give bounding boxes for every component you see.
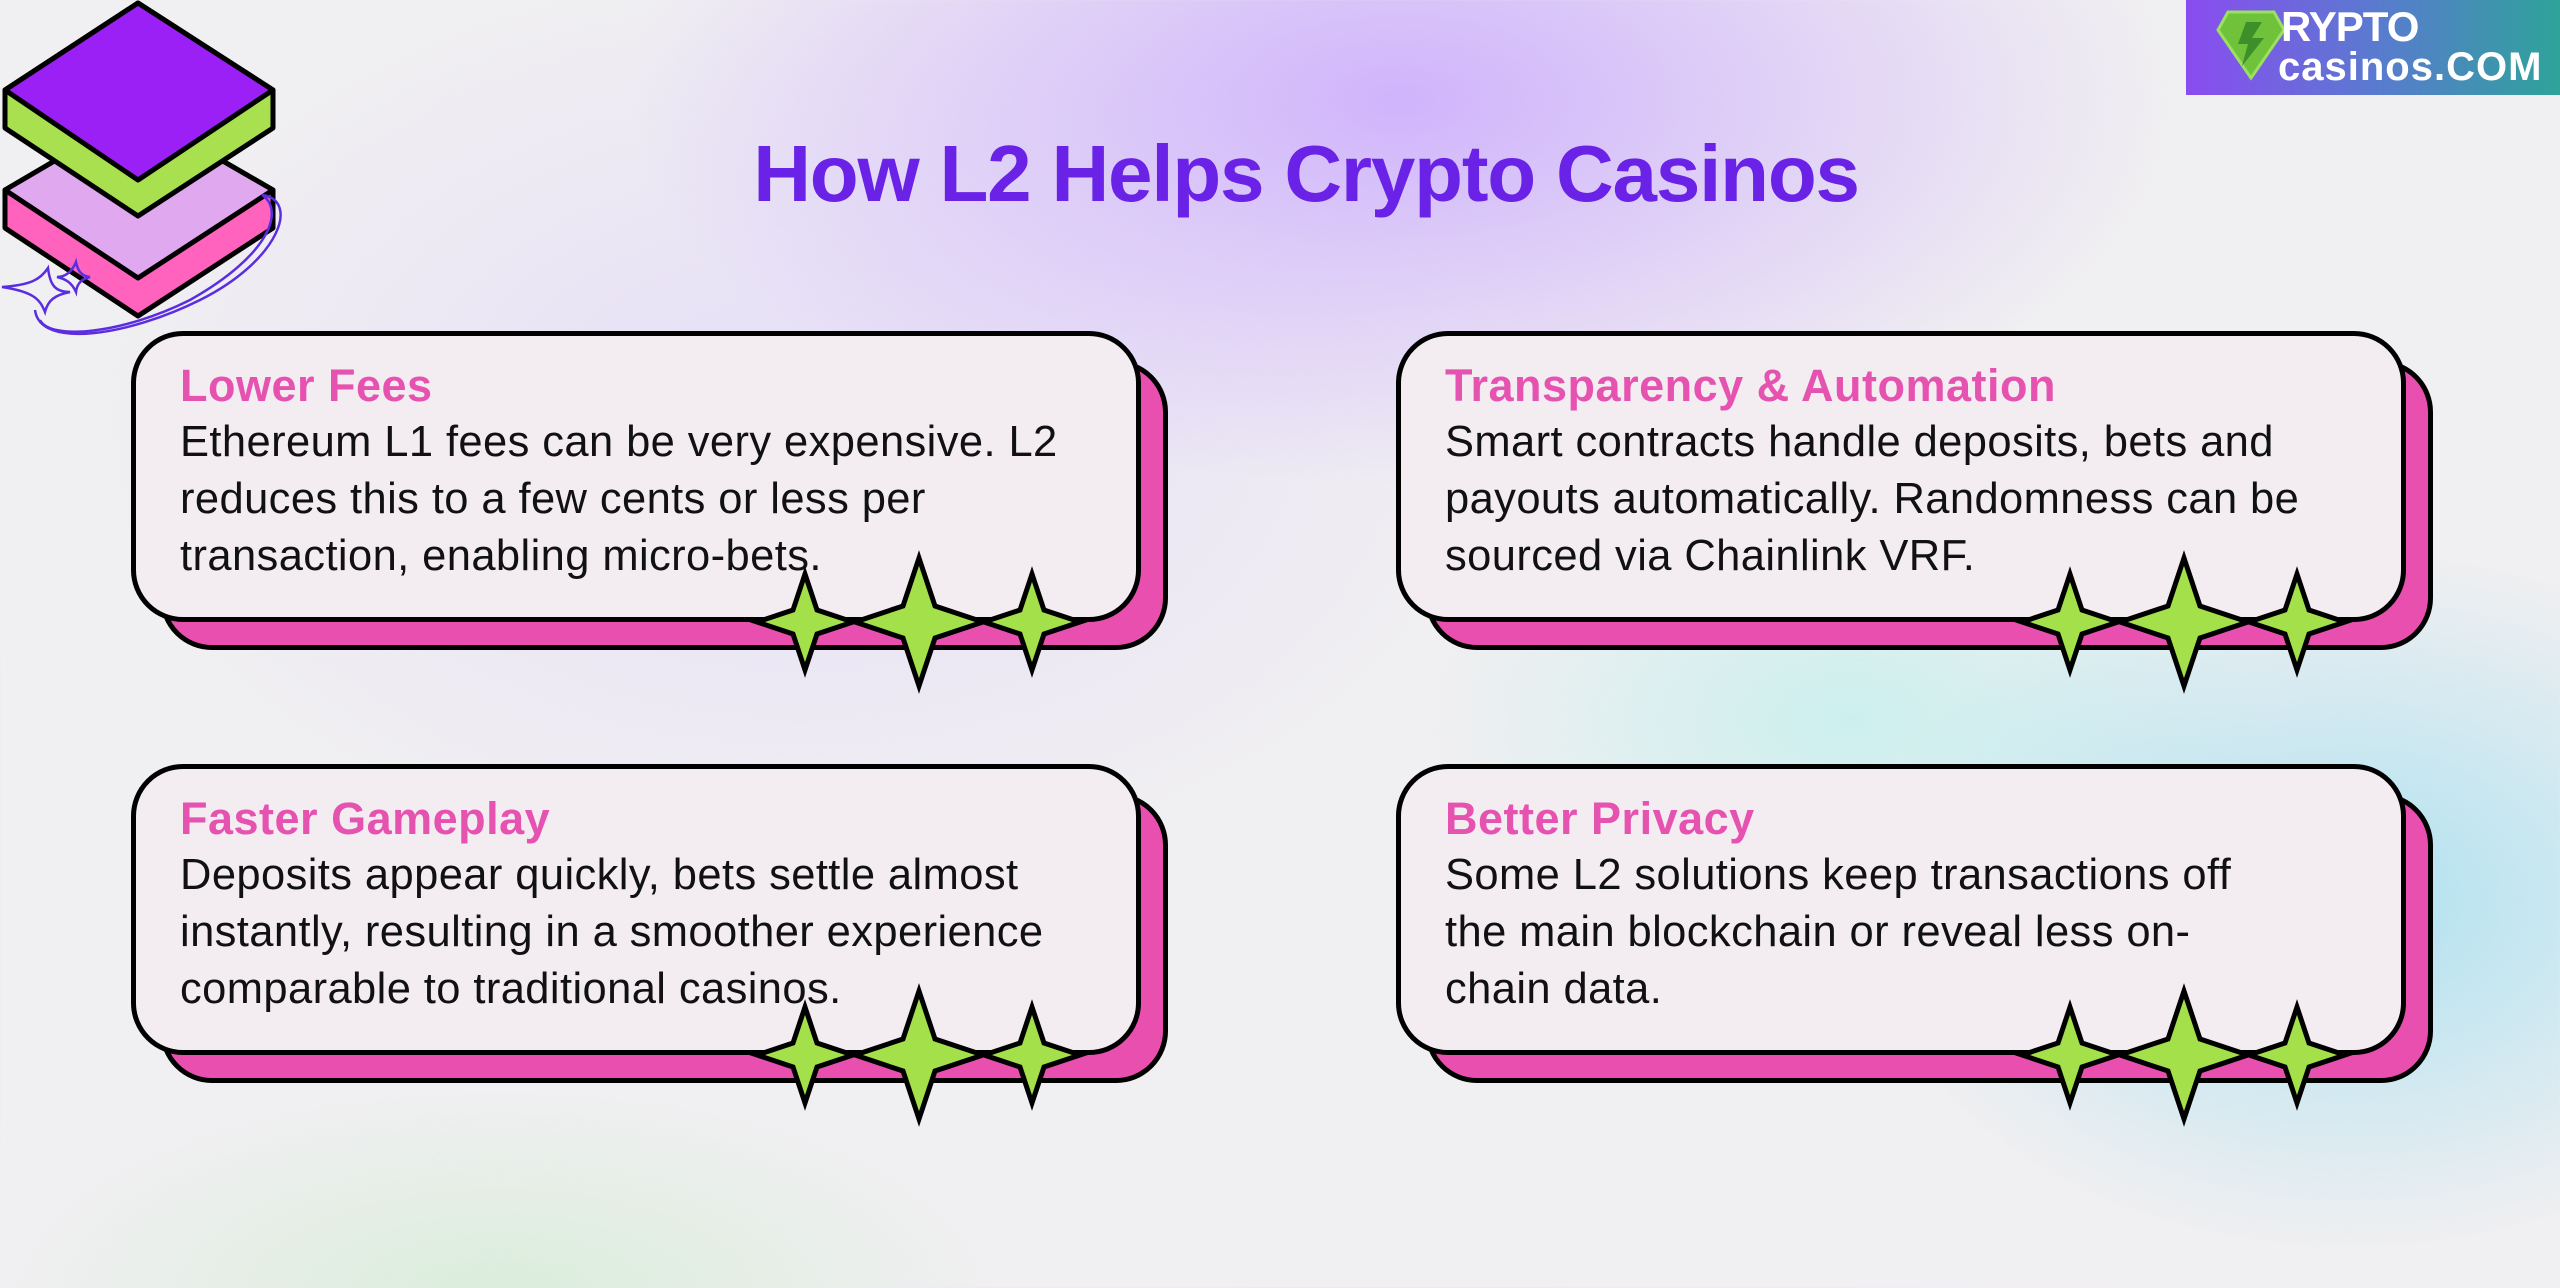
panel: lower fees [131,331,1168,694]
panel: faster gameplay: instantly, resulting in a smoother experience [180,908,1043,956]
panel: lower fees: Lower Fees [180,360,433,411]
panel: faster gameplay [131,764,1168,1127]
icon: stars [749,550,1088,694]
logo [2186,0,2560,95]
panel: better privacy: chain data. [1445,965,1662,1013]
panel: transparency & automation: sourced via Chainlink VRF. [1445,532,1975,580]
panel: lower fees: reduces this to a few cents or less per [180,475,926,523]
panel: better privacy [1396,764,2433,1127]
panel: transparency & automation: Smart contracts handle deposits, bets and [1445,418,2274,466]
icon: stars [2014,983,2353,1127]
icon: stars [749,983,1088,1127]
panel: lower fees: Ethereum L1 fees can be very expensive. L2 [180,418,1058,466]
panel: lower fees: transaction, enabling micro-bets. [180,532,822,580]
panel: faster gameplay: Faster Gameplay [180,793,550,844]
logo: casinos.COM [2278,45,2542,89]
panel: faster gameplay: comparable to traditional casinos. [180,965,842,1013]
logo: RYPTO [2281,3,2418,50]
panel: transparency & automation: payouts automatically. Randomness can be [1445,475,2299,523]
icon: stars [2014,550,2353,694]
panel: better privacy: the main blockchain or reveal less on- [1445,908,2190,956]
panel: better privacy: Better Privacy [1445,793,1755,844]
panel: transparency & automation [1396,331,2433,694]
icon: diamond logo [2216,10,2284,80]
panel: transparency & automation: Transparency & Automation [1445,360,2056,411]
icon: stacked layers [2,0,282,336]
panel: better privacy: Some L2 solutions keep transactions off [1445,851,2231,899]
panel: faster gameplay: Deposits appear quickly, bets settle almost [180,851,1018,899]
title: How L2 Helps Crypto Casinos [753,129,1859,218]
